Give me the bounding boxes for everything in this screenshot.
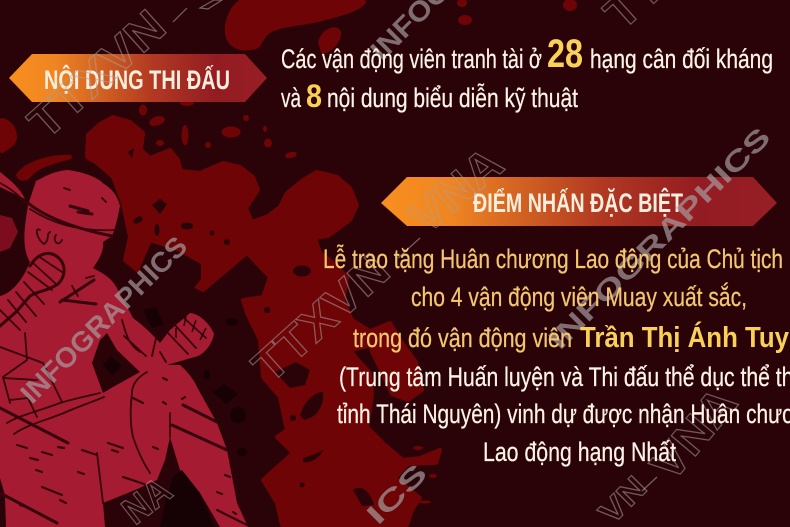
text: event categories [281,32,773,114]
text: special highlight [323,243,790,467]
text: event categories: 28 [547,32,583,76]
watermarks: VNA [640,377,747,490]
text: event categories: nội dung biểu diễn kỹ thuật [327,82,578,113]
banner: nội dung thi đấu: NỘI DUNG THI ĐẤU [44,64,230,95]
watermarks: VNA [399,136,513,244]
watermarks: TTXVN [18,0,175,148]
text: special highlight: Lao động hạng Nhất [483,437,676,467]
muay fighter silhouette [0,170,248,527]
text: event categories: và [281,83,302,113]
dark spots in the splatter [128,148,374,506]
watermarks: INFOGRAPHICS [14,230,193,409]
banner: điểm nhấn đặc biệt [381,177,777,226]
banner: nội dung thi đấu [9,54,267,102]
text: event categories: Các vận động viên tranh tài ở [281,44,542,74]
text: special highlight: trong đó vận động viên [353,323,572,353]
watermarks: TTXVN [242,243,399,392]
watermarks: INFOGRAPHICS [542,121,776,355]
text: event categories: 8 [306,78,322,114]
blood splatter background [2,2,440,525]
banner: điểm nhấn đặc biệt: ĐIỂM NHẤN ĐẶC BIỆT [473,187,683,218]
